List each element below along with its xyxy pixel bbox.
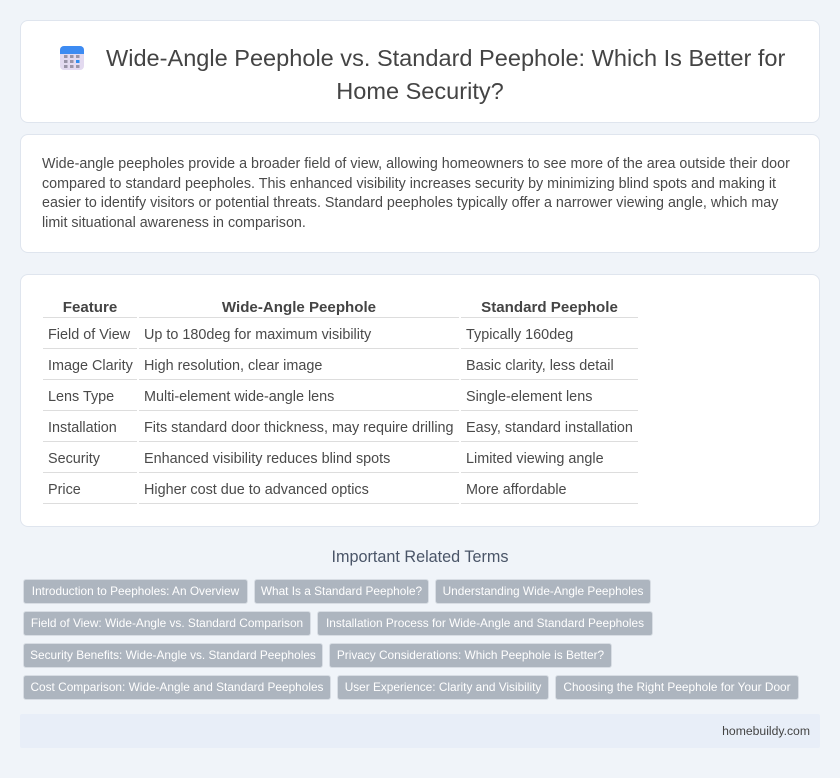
comparison table: Higher cost due to advanced optics: [144, 482, 369, 498]
icon: calendar: [60, 46, 84, 70]
panel: intro card: [20, 134, 820, 253]
text block: introduction: easier to identify visitors or potential threats. Standard peepholes typically offer a narrower viewing angle, which may: [42, 195, 778, 211]
comparison table: Fits standard door thickness, may require drilling: [144, 420, 454, 436]
text block: introduction: [42, 156, 790, 231]
comparison table: Typically 160deg: [466, 327, 573, 343]
footer bar: [20, 714, 820, 748]
related term tags: What Is a Standard Peephole?: [261, 584, 422, 598]
comparison table: Price: [48, 482, 81, 498]
related term tags: Installation Process for Wide-Angle and Standard Peepholes: [326, 616, 644, 630]
panel: title card: [20, 20, 820, 123]
comparison table: More affordable: [466, 482, 567, 498]
comparison table: Basic clarity, less detail: [466, 358, 614, 374]
comparison table: Up to 180deg for maximum visibility: [144, 327, 371, 343]
comparison table: Single-element lens: [466, 389, 592, 405]
footer source text: homebuildy.com: [722, 724, 810, 738]
related term tags: Cost Comparison: Wide-Angle and Standard Peepholes: [30, 680, 323, 694]
related term tags: Understanding Wide-Angle Peepholes: [443, 584, 643, 598]
related term tags: Security Benefits: Wide-Angle vs. Standard Peepholes: [30, 648, 316, 662]
comparison table: Installation: [48, 420, 117, 436]
comparison table: Lens Type: [48, 389, 114, 405]
comparison table: Easy, standard installation: [466, 420, 633, 436]
comparison table: Field of View: [48, 327, 130, 343]
comparison table: Security: [48, 451, 100, 467]
related term tags: Field of View: Wide-Angle vs. Standard Comparison: [31, 616, 303, 630]
comparison table: Wide-Angle Peephole: [222, 299, 376, 316]
comparison table: High resolution, clear image: [144, 358, 322, 374]
comparison table: Limited viewing angle: [466, 451, 604, 467]
text block: introduction: Wide-angle peepholes provide a broader field of view, allowing homeowners to see more of the area outside their door: [42, 156, 790, 172]
comparison table: Enhanced visibility reduces blind spots: [144, 451, 390, 467]
comparison table: [43, 299, 638, 504]
title: Wide-Angle Peephole vs. Standard Peephole: Which Is Better for: [106, 45, 785, 71]
related term tags: [23, 579, 799, 700]
related term tags: Privacy Considerations: Which Peephole is Better?: [337, 648, 604, 662]
comparison table: Feature: [63, 299, 117, 316]
related term tags: Introduction to Peepholes: An Overview: [32, 584, 239, 598]
text block: introduction: compared to standard peepholes. This enhanced visibility increases security by minimizing blind spots and making it: [42, 176, 776, 192]
comparison table: Image Clarity: [48, 358, 133, 374]
title: [106, 45, 785, 104]
panel: comparison table card: [20, 274, 820, 527]
related term tags: Choosing the Right Peephole for Your Door: [563, 680, 791, 694]
comparison table: Standard Peephole: [481, 299, 618, 316]
text block: introduction: limit situational awareness in comparison.: [42, 215, 306, 231]
title: Home Security?: [336, 78, 504, 104]
comparison table: Multi-element wide-angle lens: [144, 389, 334, 405]
related term tags: User Experience: Clarity and Visibility: [345, 680, 541, 694]
heading: related terms: Important Related Terms: [332, 548, 508, 566]
